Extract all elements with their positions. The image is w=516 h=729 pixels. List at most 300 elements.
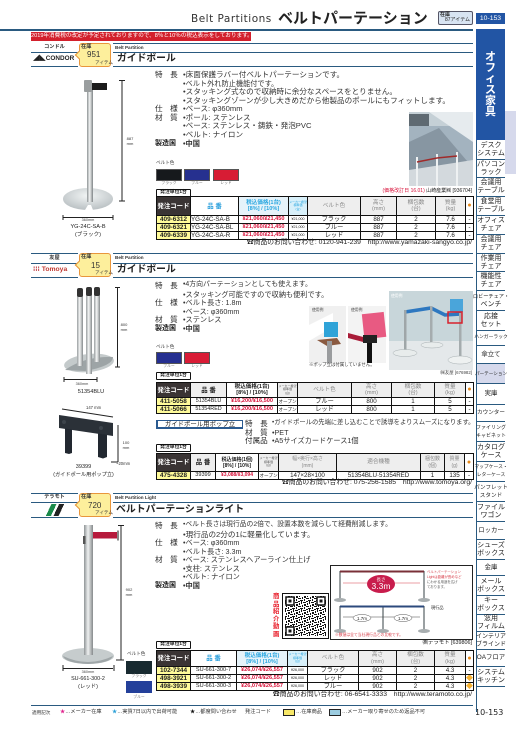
table 4: SU-661-300-7 [196,667,231,673]
table 1: (台) [296,207,300,211]
table 1: 2 [414,232,418,239]
product name 3: (レッド) [78,684,98,690]
table 2: 800 [366,406,377,413]
table 4: 498-3921 [160,675,187,682]
table 3: 475-4328 [160,472,187,479]
spec text 3: •ベース: φ360mm [183,538,239,547]
text: mm [126,592,132,597]
table 3: メーカー希望 [259,456,278,460]
sidebar page number tab [476,13,505,24]
table 2: (台) [408,390,418,396]
text: 902 [126,587,132,592]
table 1: 887 [373,216,384,223]
tab: desk: システム [477,150,505,157]
table 1: 税込価格(1台) [246,200,281,206]
usage labels: ㈱友屋 [676982] [441,370,472,375]
table 3: オープン [259,473,278,478]
order unit tag 1: 発注単位1台 [160,190,187,195]
page header [191,10,473,27]
usage labels: ※ポップ立は付属していません。 [309,362,375,367]
tab: key box [477,596,505,615]
table 2: ¥16,200/¥16,500 [231,398,273,404]
tab: shoe box [477,540,505,560]
table 3: 39399 [195,472,211,478]
tab: pc rack [477,160,505,178]
table 2: 発注コード [158,386,189,394]
spec text 1: •スタッキング式なので収納時に余分なスペースをとりません。 [183,87,397,96]
table 1: ¥21,060/¥21,450 [242,224,284,230]
tab: mail box [477,576,505,596]
table 3: 標準価 [264,460,273,464]
comparison diagram: にわかる用途を広げ [427,579,458,584]
belt colour swatches 2 [156,344,210,368]
tab: system kitchen: システム [477,668,505,676]
tab: window film [477,615,505,632]
tab: umbrella stand: 傘立て [481,350,501,358]
tab: chair: チェア [480,281,502,288]
product name 3: 360mm [82,670,94,674]
spec text 2 [155,280,328,333]
tab: office chair: チェア [480,225,502,232]
price source note 3: ㈱テラモト [639806] [423,640,472,646]
table 2: オープン [278,407,297,412]
table 1: ¥21,000 [292,233,304,237]
table 3: 147×28×100 [290,472,325,479]
belt colour swatches 3 [126,650,152,699]
order unit tag 3 [156,444,191,452]
table 1: ¥21,060/¥21,450 [242,232,284,238]
stock badge 951: 951 [87,50,100,59]
tab: safe [477,560,505,576]
text: 887 [127,136,133,141]
table 1: メーカー希望 [289,200,307,204]
stock badge 951: 在庫 [81,44,91,50]
section 2 heading: 友屋 [49,255,60,261]
tab: work chair: 作業用 [480,254,502,262]
product name 1 [70,218,106,238]
spec text 1: •中国 [183,139,200,148]
photo: usage examples [309,291,473,370]
red notice banner [31,32,251,41]
product image: tomoya stacked poles [64,287,120,382]
order unit tag 2 [156,372,191,380]
pop stand dimensions: ~20mm [116,461,130,466]
table 1: 409-6312 [160,216,187,223]
tab: storage: 実庫 [485,390,497,397]
table 1: ● [467,202,472,209]
section 1 heading: コンドル [44,44,65,50]
sidebar lavender highlight [505,111,516,174]
table 4: ブルー [324,683,342,690]
table 1: ブラック [322,216,346,223]
stock badge 15: 15 [91,261,100,270]
sidebar category heading: ィ [485,73,496,85]
table 2: 51354BLU [196,398,221,404]
table 4: ◆ [466,674,473,682]
tab: shoe box: シューズ [477,542,505,548]
tab: filing cabinet: キャビネット [476,432,506,438]
table 1: レッド [325,232,343,239]
page header: ベルトパーテーション [278,10,428,27]
order unit tag 1 [156,189,191,197]
usage labels: 使用例 [312,308,323,312]
table 3: 135 [449,472,460,479]
stock badge 720: アイテム [95,510,113,515]
tab: pamphlet stand [477,482,505,502]
stock badge 720: 720 [88,501,101,510]
table 4: 質量 [444,652,456,658]
pop stand dimensions [53,405,130,478]
spec text 3: •支柱: ステンレス [183,564,240,572]
table 2: 税込価格(1台) [235,384,269,390]
tab: interior blind: インテリア [476,634,506,640]
spec text 1: 特 長 [155,70,178,79]
table 4: レッド [324,675,342,682]
belt colour swatches 1: ブラック [161,181,177,185]
table 1: - [468,232,471,239]
product name 3: SU-661-300-2 [71,676,105,682]
table 4: 発注コード [158,655,189,662]
spec text 3: 特 長 [155,521,178,530]
order unit tag 4: 発注単位1台 [160,642,187,647]
table 1: 発注コード [158,202,189,210]
spec text 2: •ベルト長さ: 1.8m [183,298,241,307]
tab: oa floor [477,650,505,667]
table 2: ベルト色 [313,387,336,393]
spec text 3: 仕 様 [155,538,178,547]
table 2: 5 [448,406,452,413]
product name 1: 360mm [82,218,94,222]
product image: pop stand [59,408,118,462]
table 2: ¥16,200/¥16,500 [231,406,273,412]
tab: locker: ロッカー [478,526,504,534]
table 1: 887 [373,232,384,239]
table 4: ¥26,000 [291,684,304,688]
pop stand dimensions: mm [123,445,129,450]
table 1: 7.6 [446,224,455,231]
table 1: (kg) [446,206,455,212]
table 1: ¥21,000 [292,217,304,221]
pop stand title tag [156,420,243,429]
spec text 3: 製造国 [155,582,176,589]
table 4: ブラック [321,667,345,674]
spec text 2: •ステンレス [183,315,221,324]
section 2 heading [31,253,473,278]
table 3: (個) [428,462,437,468]
tab: mail box: メール [480,578,501,584]
belt colour swatches 3: ブルー [133,695,145,699]
spec text 3: •ベルト長さは現行品の2倍で、設置本数を減らして経費削減します。 [183,521,392,528]
table 1: 887 [373,224,384,231]
pop stand spec text: •ガイドポールの先端に差し込むことで誘導をよりスムーズになります。 [272,419,474,426]
tab: meeting table: 会議用 [480,179,502,186]
table 4: 902 [372,675,383,682]
text: mm [127,141,133,146]
table 4 [156,650,474,691]
page header: 87アイテム [445,17,470,23]
stock badge 15: アイテム [95,270,113,275]
contact line 2: ☎商品のお問い合わせ: 075-256-1585 http://www.tomoya.org/ [282,479,472,486]
table 3: (mm) [302,462,313,468]
pop stand title tag: ガイドポール用ポップ立 [165,421,235,428]
table 4: 4.3 [446,667,454,674]
spec text 3 [155,520,392,590]
table 4: 品 番 [206,655,221,662]
table 4: 902 [372,667,383,674]
tab: safe: 金庫 [485,564,497,570]
table 2: 標準価 [283,387,292,391]
table 3: 適合機種 [367,459,390,465]
stock badge 951 [79,43,111,67]
footer legend: 発注コード [245,709,271,715]
tab: chair: 機能性 [480,273,502,280]
table 2: - [468,398,471,405]
tab: office chair: オフィス [477,217,505,224]
footer legend: 適用記次 [32,710,50,715]
tab: shoe box: ボックス [477,550,505,556]
table 2: 高さ [366,384,377,390]
spec text 3: •ベルト長さ: 3.3m [183,546,241,556]
table 2: (台) [285,391,290,395]
table 4: 標準価 [293,656,302,660]
table 4: ¥26,074/¥26,557 [241,667,283,673]
table 4: - [468,667,471,674]
section 1 heading [31,43,473,67]
table 2: 1 [411,398,415,405]
table 1: YG-24C-SA-R [191,232,230,239]
table 4: 102-7344 [160,667,187,674]
tab: filing cabinet [477,422,505,442]
spec text 1: •床面保護ラバー付ベルトパーテーションです。 [183,70,344,79]
table 2: レッド [315,406,334,413]
tab: meeting chair [477,235,505,254]
spec text 2: 特 長 [155,281,178,290]
table 4: 902 [372,683,383,690]
table 3: 税込価格(1個) [221,456,253,462]
comparison diagram: ております。 [427,584,447,589]
spec text 2: 製造国 [155,325,176,332]
table 1: YG-24C-SA-B [191,216,230,223]
tab: key box: キー [484,597,498,604]
tab: office chair [477,216,505,235]
table 1: 409-6339 [160,232,187,239]
spec text 1: •ポール: ステンレス [183,113,251,122]
pop stand spec text: •PET [272,428,288,437]
table 1: ブルー [325,224,343,231]
table 1: 質量 [445,200,456,206]
tab: file wagon: ワゴン [480,512,502,518]
spec text 2: 材 質 [155,315,178,324]
tab: storage [477,384,505,405]
tab: system kitchen [477,667,505,687]
section 3 heading: Belt Partition Light [115,495,156,500]
tab: hanger rack: ハンガーラック [474,335,508,340]
table 4: [8%] / [10%] [246,658,278,664]
page header: Belt Partitions [191,13,272,25]
table 4: ● [467,654,472,662]
tab: partition active [477,364,505,384]
product name 2 [76,382,104,395]
table 3: (g) [451,462,458,468]
table 2: ● [467,386,472,393]
tab: reception set: 応接 [484,312,498,320]
belt colour swatches 2: ブルー [163,364,175,368]
table 3: 発注コード [158,459,189,466]
table 4: (kg) [445,658,455,664]
table 4: ¥26,074/¥26,557 [241,675,283,681]
tab: pc rack: ラック [480,168,502,176]
tab: dining table: テーブル [477,206,505,213]
table 2: 5 [448,398,452,405]
tab: counter [477,405,505,422]
comparison diagram: Lightは距離が長めなど [427,574,462,579]
table 2: メーカー希望 [278,384,296,388]
pop stand spec text: 材 質 [245,428,268,437]
tab: map case [477,462,505,482]
section 3 heading: テラモト [44,494,65,500]
table 2: 411-5066 [160,406,187,413]
table 4: SU-661-300-3 [196,683,231,689]
spec text 1: •ベルト: ナイロン [183,130,243,139]
spec text 2: •4方向パーテーションとしても使えます。 [183,281,312,288]
tab: meeting chair: チェア [480,244,502,251]
table 4: 498-3939 [160,683,187,690]
contact line 1: ☎商品のお問い合わせ: 0120-941-239 http://www.yamazaki-sangyo.co.jp/ [247,239,472,246]
product name 2: 51354BLU [78,389,104,395]
table 3: ● [467,458,471,466]
pop stand spec text: 特 長 [245,419,268,428]
table 1: ベルト色 [323,203,345,209]
tab: meeting table [477,178,505,197]
table 1: 2 [414,216,418,223]
product name 2: 360mm [76,382,88,386]
table 1: 梱包数 [408,200,424,206]
section 2 heading: ⁞⁞⁞ Tomoya [33,266,67,273]
table 3: - [468,472,470,479]
table 2: 質量 [444,384,456,390]
tab: catalog case: カタログ [477,444,505,450]
table 1: - [468,224,471,231]
stock badge 720 [79,493,111,517]
table 4: (台) [411,658,420,664]
table 3: 梱包数 [425,456,440,462]
red notice banner: 2019年消費税の改定が予定されておりますので、8％と10％の税込表示をしております。 [31,33,251,39]
table 2: 1 [411,406,415,413]
tab: key box: ボックス [477,605,505,612]
table 4: 4.3 [446,683,454,690]
page number: 10-153 [475,708,503,717]
tab: map case: マップケース・ [474,464,508,470]
spec text 2: •中国 [183,324,200,333]
table 2: 51354RED [195,406,222,412]
section 1 heading: ガイドポール [117,53,176,64]
table 3: 1 [431,472,434,479]
QR code [282,593,329,639]
tab: file wagon: ファイル [477,504,505,510]
spec text 3: •現行品の2分の1に軽量化しています。 [183,530,315,538]
belt colour swatches 1: ブルー [191,181,203,185]
tab: dining table: 食堂用 [480,198,502,205]
table 4: ◆ [466,682,473,690]
tab: counter: カウンター [477,410,505,416]
spec text 1: 製造国 [155,140,176,147]
usage labels: 使用例 [351,308,362,312]
table 4: 高さ [372,652,383,658]
table 1: 標準価 [293,203,302,207]
section 2 heading: Belt Partition [115,255,144,260]
tab: window film: 窓用 [484,615,498,622]
table 1: 高さ [373,200,384,206]
table 1: (mm) [372,206,385,212]
table 1: 7.6 [446,216,455,223]
tab: hanger rack [477,331,505,346]
table 4: SU-661-300-2 [196,675,231,681]
tab: lobby chair [477,291,505,311]
tab: dining table [477,197,505,216]
tab: oa floor: OAフロア [477,654,505,661]
tab: locker [477,522,505,540]
tab: mail box: ボックス [477,586,505,592]
spec text 1 [155,70,450,148]
tab: pamphlet stand: パンフレット [474,484,508,490]
table 1: ¥21,000 [292,225,304,229]
spec text 1: •ベース: ステンレス・鋳鉄・発泡PVC [183,121,311,130]
order unit tag 2: 発注単位1台 [160,373,187,378]
pop stand spec text: 付属品 [245,436,268,445]
tab: work chair [477,254,505,272]
sidebar category heading: オ [485,51,496,63]
table 3: 品 番 [196,459,210,466]
table 1: ¥21,060/¥21,450 [242,216,284,222]
tab: reception set [477,311,505,331]
tab: window film: フィルム [477,623,505,630]
text: mm [121,327,127,332]
photo: escalator scene [409,112,473,186]
spec text 3: 材 質 [155,555,178,564]
table 4: 2 [414,683,417,690]
tab: chair [477,272,505,291]
table 1: 409-6321 [160,224,187,231]
belt colour swatches 3: ブラック [131,674,147,678]
table 1 [156,196,474,240]
spec text 1: •スタッキングゾーンが少し大きめだから他製品のポールにもフィットします。 [183,96,450,104]
product image: condor pole [62,80,125,220]
tab: meeting table: テーブル [477,187,505,194]
comparison diagram [330,565,473,640]
table 2: (mm) [365,390,378,396]
sidebar category heading: 家 [485,95,496,107]
tab: file wagon [477,502,505,522]
table 1: (台) [411,206,421,212]
comparison diagram: 3.3m [372,581,390,591]
comparison diagram: 1.7m [357,616,367,621]
pop stand dimensions: (ガイドポール用ポップ立) [53,472,114,478]
belt colour swatches 3: ベルト色 [127,651,145,656]
tab: catalog case [477,442,505,462]
table 1: [8%] / [10%] [248,206,279,212]
pop stand spec text [245,418,474,445]
spec text 3: •ベルト: ナイロン [183,572,240,581]
table 4: ¥26,000 [291,676,304,680]
footer legend [31,705,473,716]
section 2 heading: ガイドポール [117,264,176,275]
sidebar page number tab: 10-153 [480,15,501,22]
table 2: [8%] / [10%] [236,390,268,396]
section 3 heading [31,493,473,518]
table 3: ¥3,088/¥3,094 [221,472,253,478]
table 3: 質量 [449,456,460,462]
sidebar category heading: フ [485,62,496,74]
